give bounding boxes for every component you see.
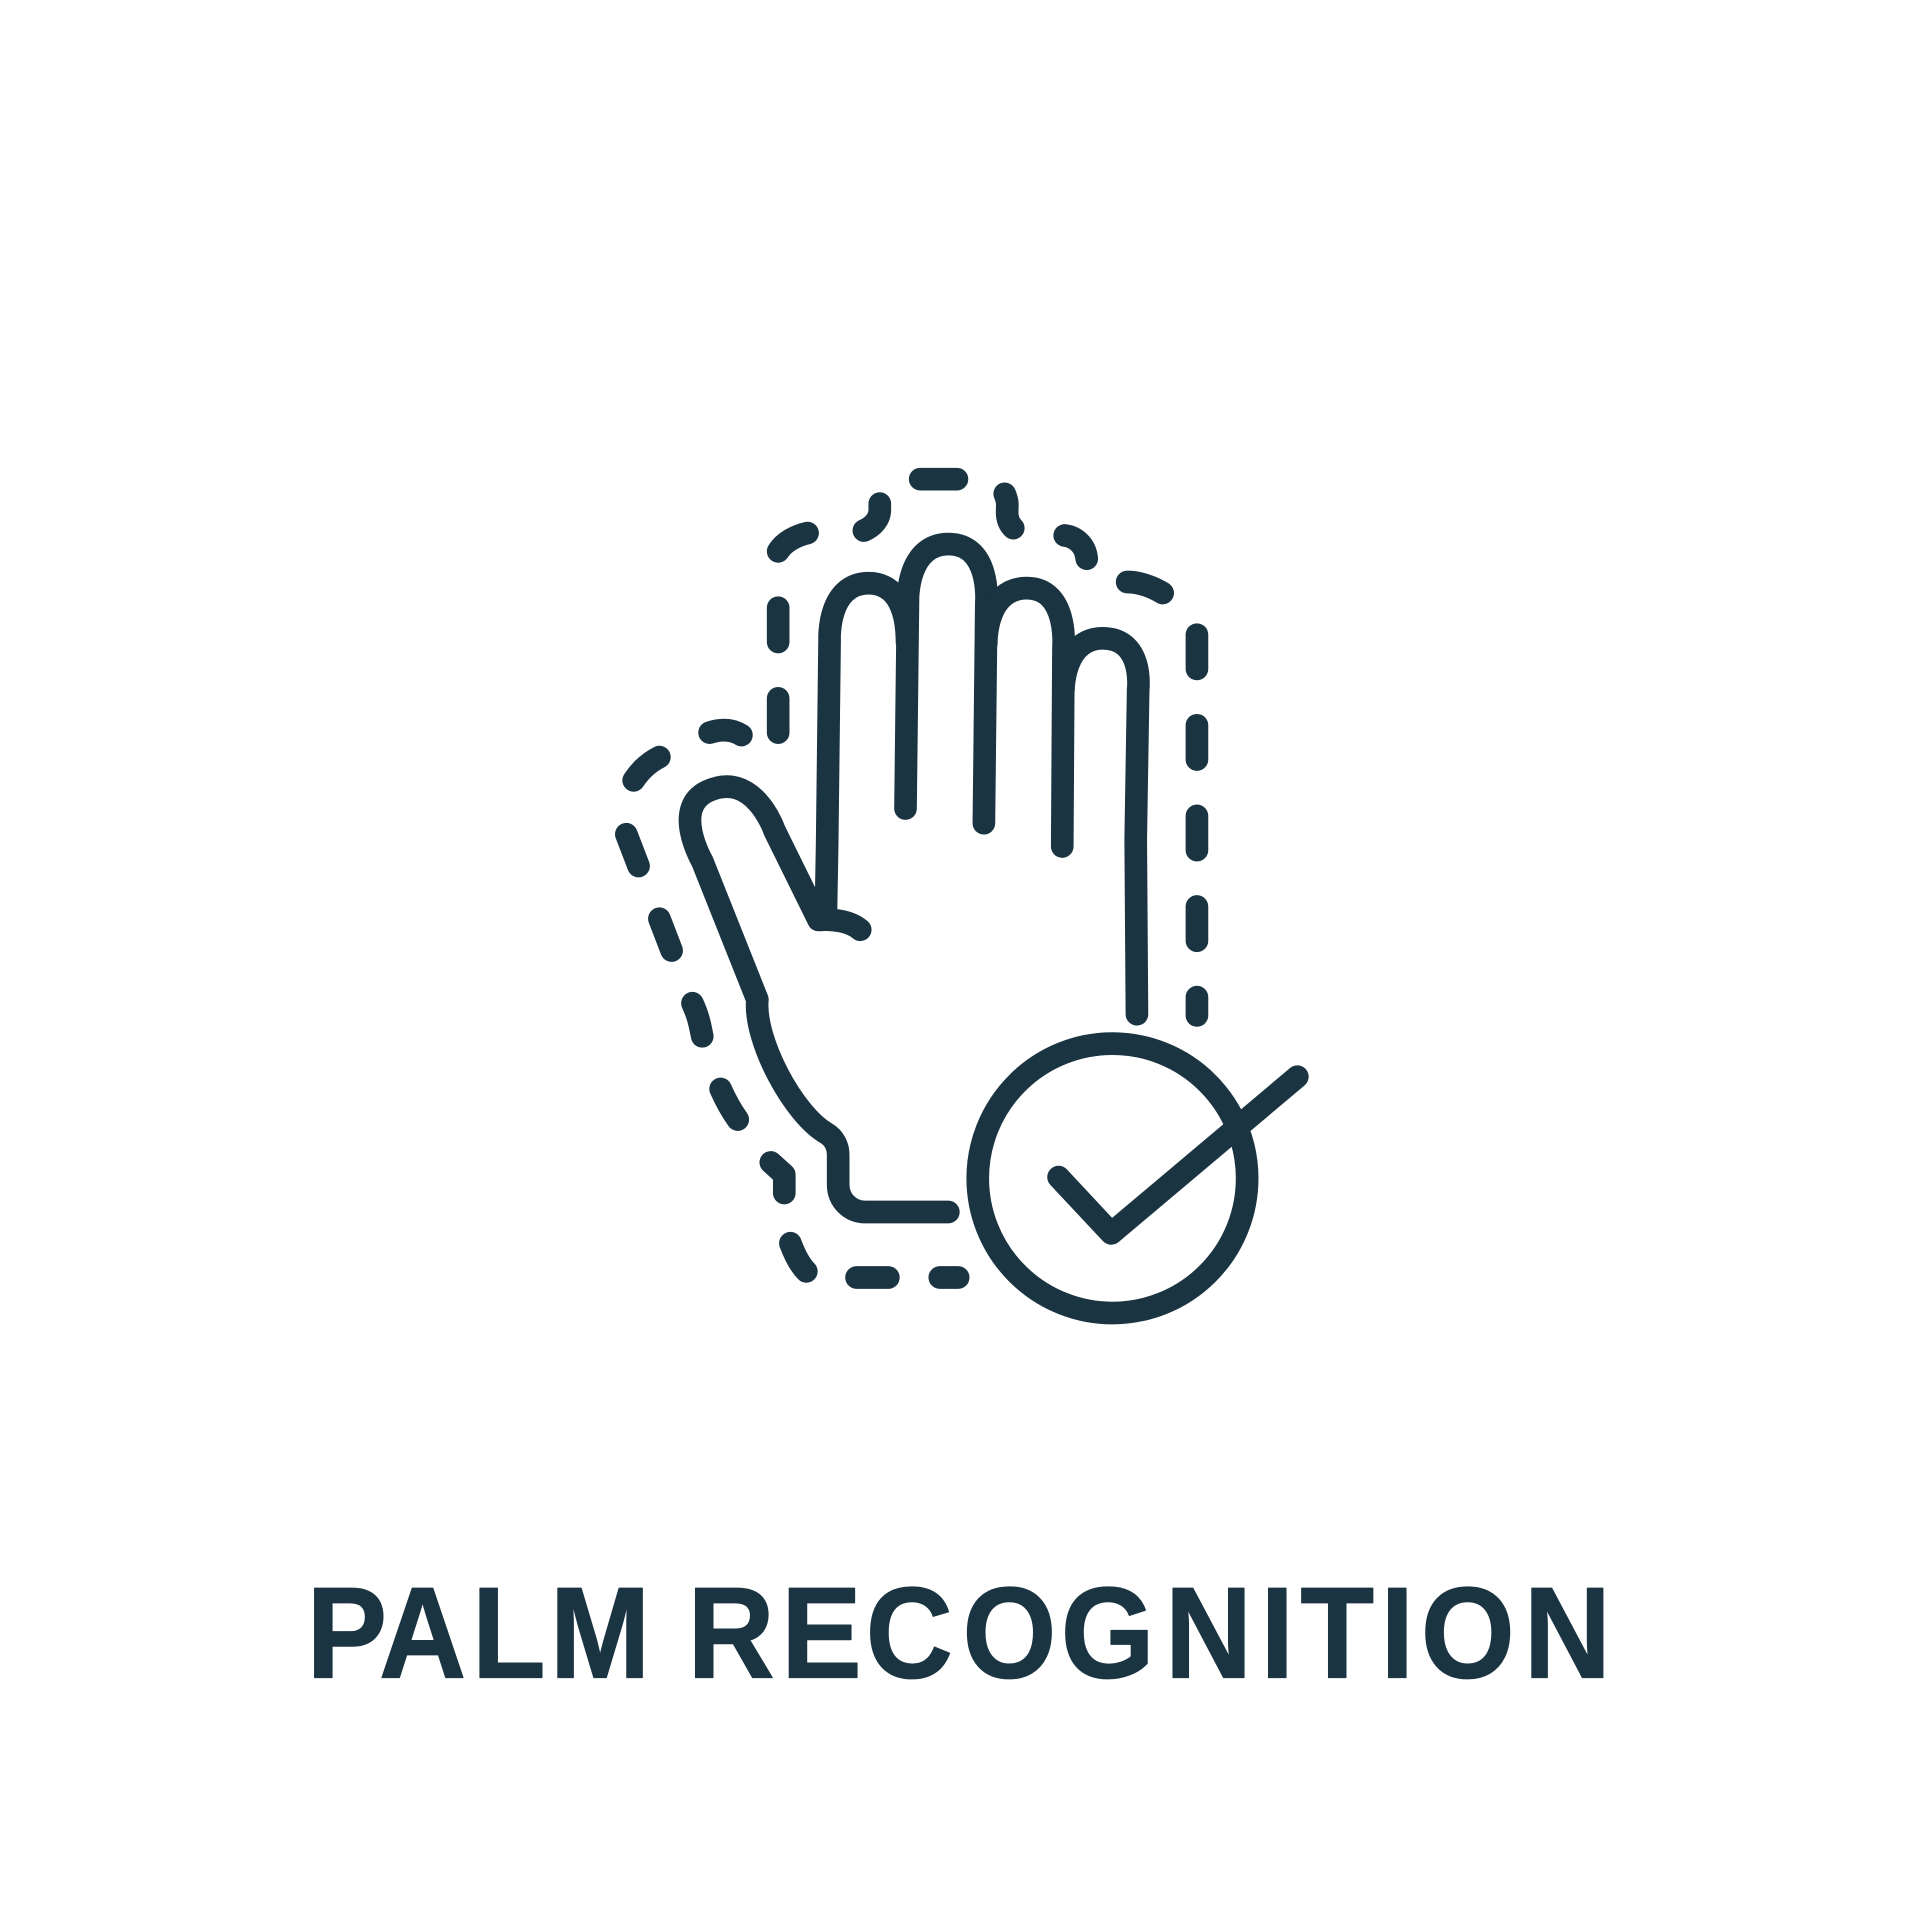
ring finger (986, 588, 1064, 846)
icon: dashed scan outline (626, 479, 1197, 1278)
middle finger (906, 544, 986, 823)
index finger (826, 583, 907, 913)
icon: hand outline (690, 544, 1138, 1212)
thumb, palm and wrist (690, 787, 948, 1212)
icon: verification circle with check mark (978, 1044, 1297, 1313)
title: PALM RECOGNITION (307, 1561, 1611, 1706)
icon: palm recognition (626, 479, 1297, 1313)
little finger and palm edge (1063, 638, 1138, 1014)
